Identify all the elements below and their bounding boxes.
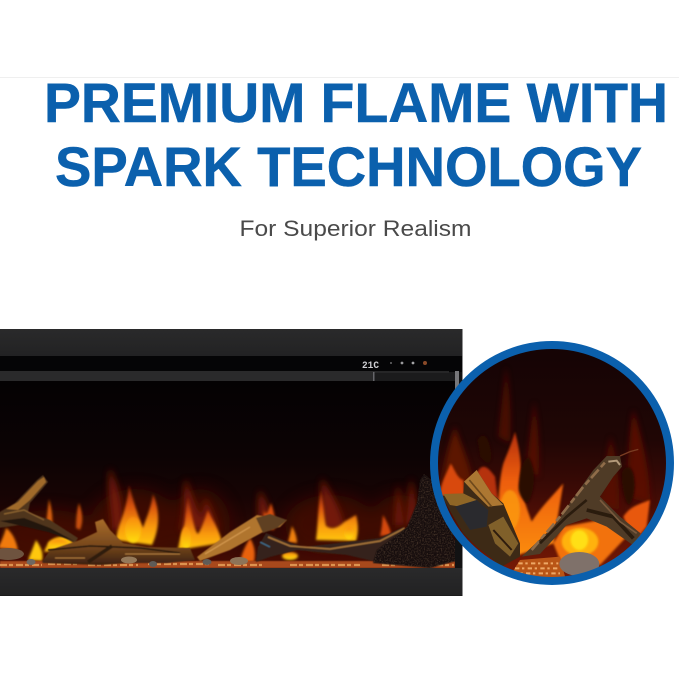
dim red streaks [440,367,650,510]
circle backdrop [437,348,667,578]
yellow flame cores [48,517,354,560]
log: long dark [256,527,415,562]
title: PREMIUM FLAME WITH [44,72,668,134]
zoom circle detail [434,345,670,587]
log: left chunk [442,470,520,567]
infographic canvas [0,77,679,596]
log: diagonal [197,514,287,561]
log: charred stump [373,474,460,568]
background red glow [0,489,430,561]
ember bed [0,560,455,568]
blue ring [434,345,670,581]
fireplace [0,329,462,596]
control panel display [362,361,427,372]
bright flames [0,485,391,562]
main orange flames [439,432,650,565]
log: left branch [0,475,78,543]
fireplace frame [0,329,462,596]
pebble [559,552,599,576]
log: right branch [522,449,641,557]
dark flame gaps [477,435,635,505]
title [44,72,668,198]
control panel display: 21C [362,361,379,372]
pebbles [0,548,248,567]
yellow flame core [500,490,598,556]
red flame tongues [109,468,416,530]
subtitle: For Superior Realism [240,216,472,241]
gravel bed [514,556,565,577]
log: centre [42,519,195,565]
firebox with flames [0,381,460,568]
title: SPARK TECHNOLOGY [55,136,642,198]
logs [0,474,460,568]
